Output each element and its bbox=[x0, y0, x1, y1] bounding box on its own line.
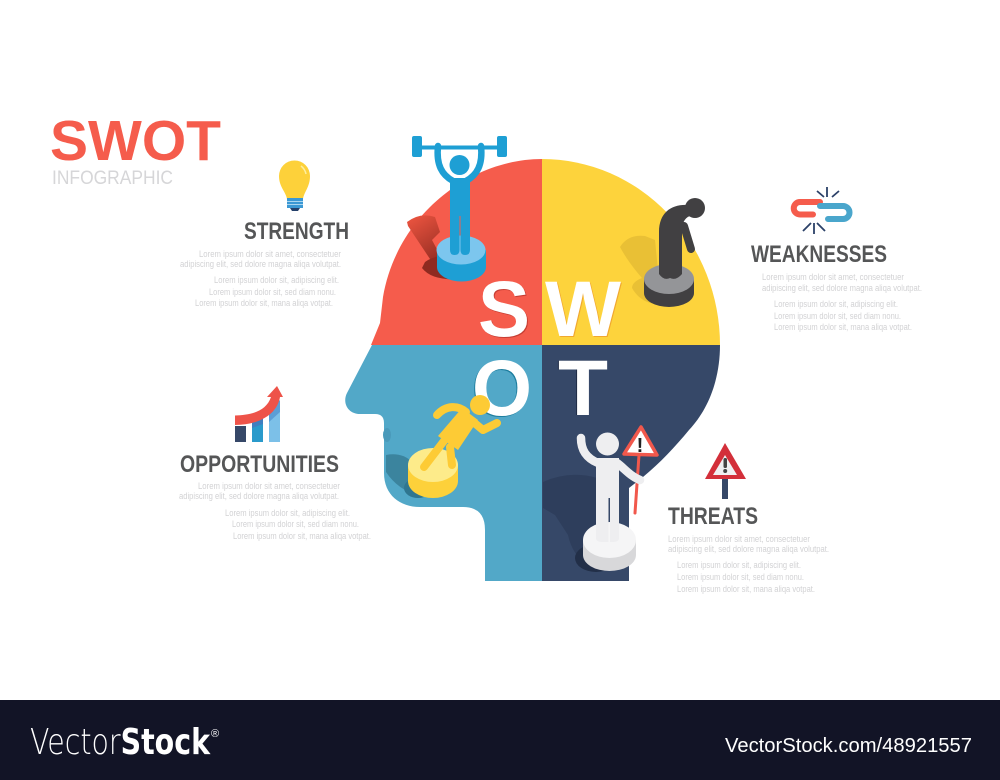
shadow bbox=[620, 236, 658, 304]
body bbox=[450, 178, 470, 255]
body bbox=[659, 205, 690, 279]
body text: adipiscing elit, sed dolore magna aliqa volutpat. bbox=[668, 544, 829, 554]
heading: OPPORTUNITIES bbox=[180, 451, 339, 478]
body text bbox=[180, 249, 341, 308]
head bbox=[450, 155, 470, 175]
big letters S W O T bbox=[471, 264, 622, 433]
quadrant: strength bbox=[371, 159, 542, 345]
body text: Lorem ipsum dolor sit amet, consectetuer bbox=[199, 249, 341, 259]
letter W: W bbox=[545, 264, 621, 353]
body text: Lorem ipsum dolor sit, adipiscing elit. bbox=[214, 275, 339, 285]
figure: runner on yellow pedestal bbox=[383, 407, 497, 498]
body text bbox=[668, 534, 829, 594]
body text: Lorem ipsum dolor sit, mana aliqa votpat. bbox=[677, 584, 815, 594]
footer url: VectorStock.com/48921557 bbox=[725, 735, 972, 757]
figure: weightlifter on blue pedestal bbox=[407, 136, 507, 282]
panel: weaknesses bbox=[751, 187, 922, 332]
heading: STRENGTH bbox=[244, 218, 349, 245]
quadrant: opportunities bbox=[345, 345, 542, 581]
letter T: T bbox=[557, 343, 607, 432]
body bbox=[596, 458, 619, 542]
heading: THREATS bbox=[668, 503, 758, 530]
body text: Lorem ipsum dolor sit, adipiscing elit. bbox=[225, 508, 350, 518]
limbs bbox=[424, 407, 497, 467]
sign bbox=[635, 455, 639, 513]
body text bbox=[179, 481, 371, 541]
body text: adipiscing elit, sed dolore magna aliqa volutpat. bbox=[179, 491, 339, 501]
pedestal bbox=[437, 250, 486, 282]
head bbox=[596, 432, 619, 456]
footer logo: VectorStock bbox=[30, 722, 211, 763]
arm bbox=[684, 226, 691, 249]
letter O: O bbox=[471, 344, 531, 433]
body text: Lorem ipsum dolor sit, sed diam nonu. bbox=[774, 311, 901, 321]
icon: warning sign bbox=[705, 443, 746, 499]
icon: light bulb bbox=[279, 160, 310, 211]
icon: rising bar chart with arrow bbox=[235, 386, 283, 442]
pedestal bbox=[408, 465, 458, 498]
letter W: W bbox=[546, 265, 622, 354]
letter O: O bbox=[472, 343, 532, 432]
figure: person holding warning sign on white pedestal bbox=[543, 427, 657, 572]
icon: broken chain bbox=[794, 187, 850, 234]
body text: Lorem ipsum dolor sit amet, consectetuer bbox=[198, 481, 340, 491]
arms bbox=[581, 438, 640, 480]
body text: Lorem ipsum dolor sit, mana aliqa votpat. bbox=[233, 531, 371, 541]
registered mark: ® bbox=[211, 728, 219, 740]
figure: person holding warning sign on white pedestal: ! bbox=[637, 435, 643, 457]
heading: WEAKNESSES bbox=[751, 241, 887, 268]
title: INFOGRAPHIC bbox=[52, 168, 173, 189]
footer bar bbox=[0, 700, 1000, 780]
body text: Lorem ipsum dolor sit, adipiscing elit. bbox=[774, 299, 898, 309]
torso bbox=[438, 408, 478, 450]
body text: Lorem ipsum dolor sit amet, consectetuer bbox=[762, 272, 904, 282]
quadrant: threats bbox=[542, 345, 720, 581]
head divided into four quadrants bbox=[345, 159, 720, 581]
letter S: S bbox=[479, 265, 531, 354]
runner head over O bbox=[470, 395, 490, 415]
shadow bbox=[543, 475, 597, 568]
quadrant: weaknesses bbox=[542, 159, 720, 345]
pedestal bbox=[644, 279, 694, 307]
body text: Lorem ipsum dolor sit, sed diam nonu. bbox=[677, 572, 804, 582]
panel: strength bbox=[180, 160, 349, 308]
title: SWOT bbox=[50, 109, 221, 173]
barbell bbox=[412, 146, 507, 150]
pedestal bbox=[583, 540, 636, 571]
body text bbox=[762, 272, 922, 332]
shadow bbox=[386, 454, 418, 495]
panel: opportunities bbox=[179, 386, 371, 541]
body text: Lorem ipsum dolor sit, adipiscing elit. bbox=[677, 560, 801, 570]
body text: Lorem ipsum dolor sit, mana aliqa votpat. bbox=[195, 298, 333, 308]
figure: slumped person on grey pedestal bbox=[620, 198, 705, 307]
body text: adipiscing elit, sed dolore magna aliqa volutpat. bbox=[180, 259, 341, 269]
arms bbox=[438, 146, 481, 181]
letter T: T bbox=[558, 343, 608, 432]
body text: Lorem ipsum dolor sit, sed diam nonu. bbox=[209, 287, 336, 297]
body text: Lorem ipsum dolor sit, sed diam nonu. bbox=[232, 519, 359, 529]
letter S: S bbox=[478, 264, 530, 353]
body text: Lorem ipsum dolor sit, mana aliqa votpat. bbox=[774, 322, 912, 332]
body text: Lorem ipsum dolor sit amet, consectetuer bbox=[668, 534, 810, 544]
head bbox=[685, 198, 705, 218]
shadow bbox=[407, 215, 447, 268]
panel: threats bbox=[668, 443, 829, 594]
body text: adipiscing elit, sed dolore magna aliqa volutpat. bbox=[762, 283, 922, 293]
